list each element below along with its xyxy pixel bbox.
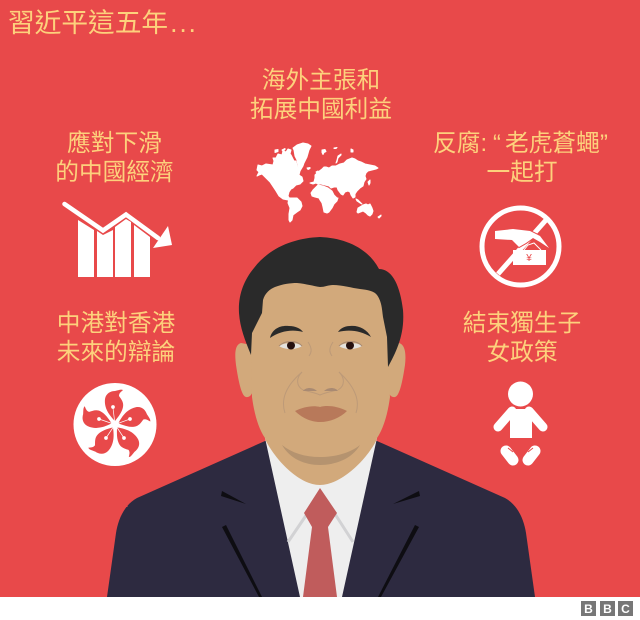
- eyes: [279, 342, 362, 350]
- heading: anti-corruption: 老虎蒼蠅: [505, 130, 600, 157]
- lapel marks: [221, 491, 420, 597]
- footer: BBC logo: C: [621, 602, 630, 616]
- hair: [239, 237, 403, 367]
- chin shadow: [282, 445, 360, 465]
- topic: anti-corruption: [433, 130, 608, 285]
- icon: falling bar chart with arrow: [64, 204, 172, 277]
- heading: one-child policy: 女政策: [486, 339, 558, 366]
- heading: anti-corruption: :: [480, 131, 487, 157]
- topic: one-child policy: [463, 310, 581, 460]
- title: 習近平這五年...: [8, 8, 198, 38]
- heading: one-child policy: 結束獨生子: [463, 310, 581, 337]
- icon: no bribery sign: ¥: [525, 253, 532, 264]
- suit jacket: [107, 441, 535, 597]
- tie: [303, 488, 337, 597]
- icon: no bribery sign: [482, 208, 559, 285]
- nose and cheek lines: [284, 342, 357, 413]
- icon: Hong Kong bauhinia: [74, 383, 156, 466]
- lips: [295, 406, 347, 422]
- nostrils: [303, 388, 338, 391]
- ears: [235, 343, 405, 397]
- icon: world map: [257, 143, 381, 222]
- portrait: Xi Jinping: [107, 237, 535, 597]
- heading line 2: 一起打: [486, 159, 558, 186]
- heading: Hong Kong: 中港對香港: [57, 310, 176, 337]
- topic: overseas interests: [250, 67, 392, 222]
- eyebrows: [270, 326, 371, 338]
- footer: BBC logo: B: [603, 602, 612, 616]
- footer: BBC logo: [581, 601, 633, 616]
- face: [251, 283, 390, 485]
- heading: economy: 的中國經濟: [55, 159, 174, 186]
- heading: Hong Kong: 未來的辯論: [57, 339, 175, 366]
- heading: anti-corruption: 反腐: [433, 130, 480, 157]
- icon: baby: [498, 382, 543, 460]
- shirt: [265, 438, 377, 597]
- collar shadows: [288, 514, 353, 542]
- topic: Hong Kong: [57, 310, 176, 466]
- footer: BBC logo: B: [584, 602, 593, 616]
- heading: overseas interests: 海外主張和: [262, 67, 380, 94]
- heading: overseas interests: 拓展中國利益: [250, 96, 392, 123]
- heading: economy: 應對下滑: [67, 130, 162, 157]
- topic: economy: [55, 130, 174, 277]
- heading: anti-corruption: “: [493, 131, 501, 157]
- heading: anti-corruption: ”: [600, 131, 608, 157]
